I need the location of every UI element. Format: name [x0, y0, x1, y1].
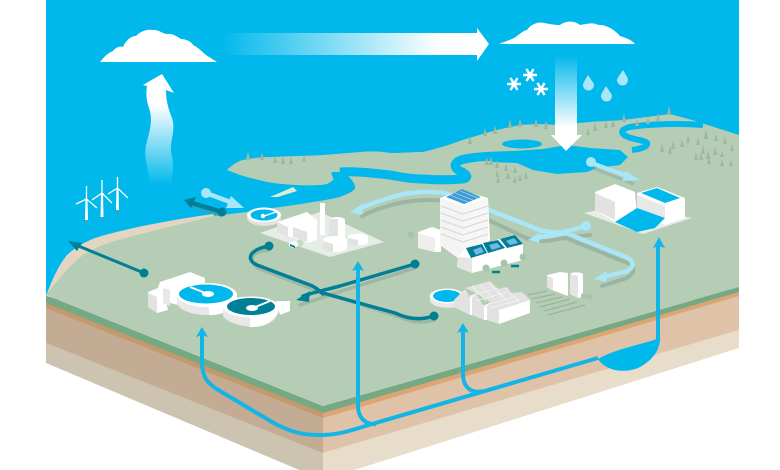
arrow: intake from lake	[586, 157, 640, 184]
ground: soil layers	[46, 287, 739, 470]
sky and sea	[46, 0, 739, 300]
teal wastewater pipelines	[68, 241, 438, 322]
cloud right	[499, 22, 635, 44]
light pipeline arrowheads	[350, 203, 607, 282]
boat	[270, 187, 297, 197]
icon: rain drops	[583, 70, 628, 102]
pond	[502, 140, 542, 148]
office tower	[440, 189, 490, 262]
fields	[528, 291, 585, 315]
cloud left	[100, 30, 217, 62]
small building beside tower	[418, 227, 441, 252]
trees	[246, 106, 734, 183]
arrow: outflow pair to sea	[184, 188, 244, 216]
light water pipeline	[358, 192, 633, 286]
wind turbines	[76, 177, 128, 222]
land surface	[46, 114, 739, 406]
groundwater arrowheads	[196, 237, 665, 337]
power plant	[260, 203, 384, 257]
greenhouses	[454, 281, 530, 324]
pond at greenhouses	[430, 288, 464, 308]
coastal wastewater plant	[148, 272, 290, 327]
water treatment plant: coast	[247, 208, 281, 226]
groundwater pipelines	[202, 245, 658, 435]
houses with solar roofs	[457, 235, 526, 273]
beach	[46, 214, 230, 300]
arrow: precipitation	[551, 55, 582, 151]
arrow: evaporation	[143, 74, 174, 185]
icon: snowflakes	[507, 69, 548, 95]
groundwater aquifer	[598, 338, 660, 371]
farm buildings	[547, 272, 593, 300]
reservoir treatment plant	[584, 184, 692, 234]
arrow: wind transport	[220, 28, 489, 61]
tree beside tower	[408, 232, 414, 238]
river and lake	[340, 124, 703, 180]
